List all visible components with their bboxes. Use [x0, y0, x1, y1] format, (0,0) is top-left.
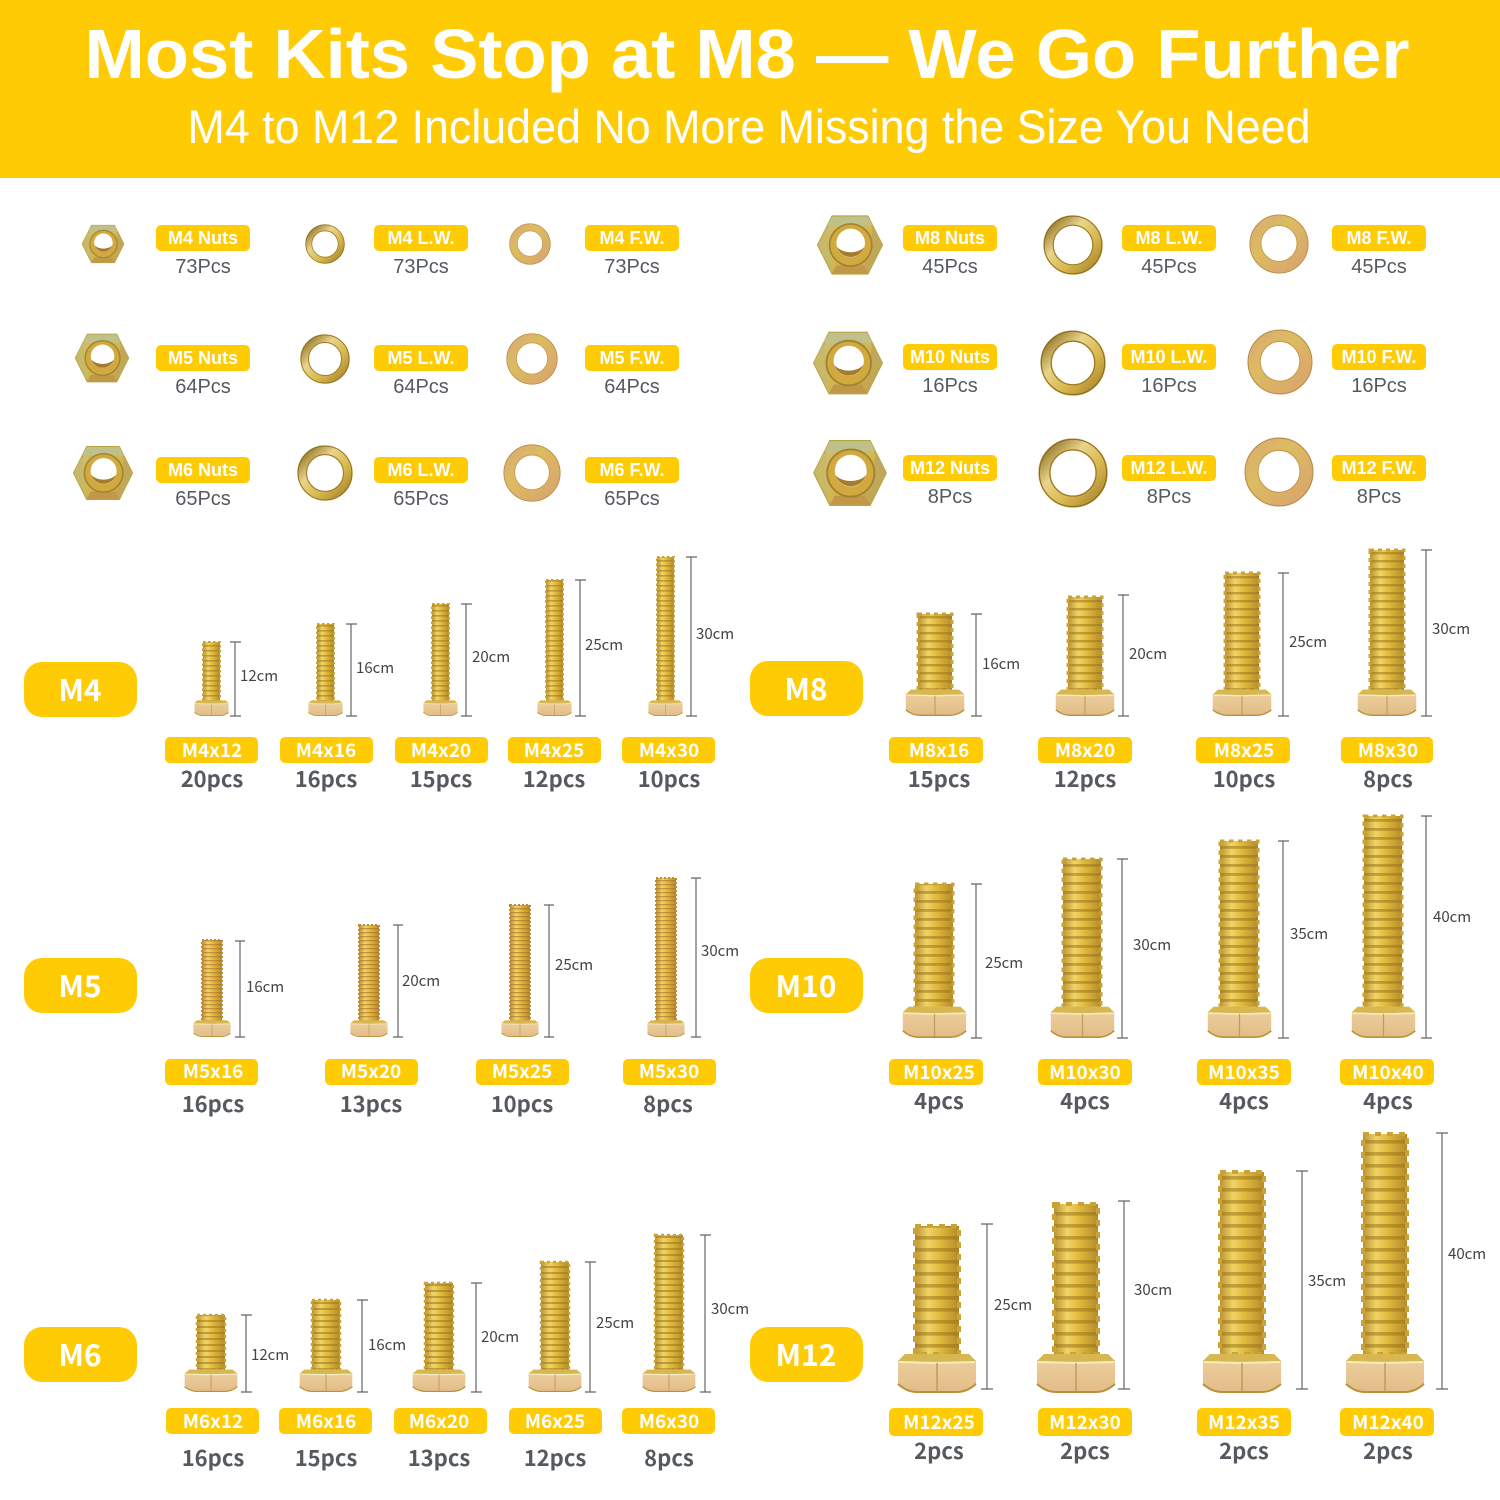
bolt M5x30: 30cm — [701, 940, 739, 961]
label: M8 F.W. — [1332, 225, 1426, 278]
label M10x35 — [1197, 1058, 1291, 1116]
label M12x35 — [1197, 1408, 1291, 1466]
panel: nuts and washers M4-M6 — [74, 224, 679, 510]
label M6x25 — [509, 1407, 602, 1473]
label M5x30 — [623, 1057, 716, 1119]
icon: M5 nut — [76, 334, 128, 382]
bolt M5x20: 20cm — [402, 970, 440, 991]
label M6x12: 16pcs — [182, 1441, 244, 1473]
label: M4 Nuts — [156, 225, 250, 278]
label M4x30 — [622, 736, 715, 794]
icon: M8 lock washer — [1044, 216, 1102, 274]
bolt M12x40: 40cm — [1448, 1243, 1486, 1264]
label M6x30 — [622, 1407, 715, 1473]
label M12x25 — [889, 1408, 983, 1466]
label M5x25 — [476, 1057, 569, 1119]
label: M12 L.W. — [1122, 455, 1216, 508]
bolt M4x20 — [423, 604, 510, 716]
label: M6 L.W. — [374, 457, 468, 510]
icon: M8 flat washer — [1250, 215, 1308, 273]
label M10x25: M10x25 — [903, 1058, 975, 1085]
label: M8 Nuts: 45Pcs — [922, 256, 978, 278]
label: M4 F.W. — [585, 225, 679, 278]
label M4x12: M4x12 — [182, 736, 242, 763]
bolt M6x30: 30cm — [711, 1298, 749, 1319]
bolt M4x30: 30cm — [696, 623, 734, 644]
label M4x16: 16pcs — [295, 762, 357, 794]
M5 size badge — [24, 958, 137, 1013]
label M6x30: M6x30 — [639, 1407, 699, 1434]
bolt M6x25: 25cm — [596, 1312, 634, 1333]
icon: M8 nut — [818, 216, 882, 274]
label M8x20: 12pcs — [1054, 762, 1116, 794]
label: M8 Nuts: M8 Nuts — [915, 228, 985, 248]
label M4x20: 15pcs — [410, 762, 472, 794]
icon: M12 lock washer — [1039, 439, 1107, 507]
label: M4 L.W.: 73Pcs — [393, 256, 449, 278]
bolt M6x30 — [643, 1235, 749, 1392]
M6 size badge: M6 — [58, 1331, 102, 1375]
bolt M5x25: 25cm — [555, 954, 593, 975]
bolt M12x30: 30cm — [1134, 1279, 1172, 1300]
bolt M4x16: 16cm — [356, 657, 394, 678]
label: M12 Nuts: 8Pcs — [928, 486, 972, 508]
bolt M6x20 — [413, 1283, 519, 1392]
label: M5 Nuts: M5 Nuts — [168, 348, 238, 368]
label M6x20: 13pcs — [408, 1441, 470, 1473]
label M5x16: 16pcs — [182, 1087, 244, 1119]
label M8x20: M8x20 — [1055, 736, 1115, 763]
label: M10 F.W.: 16Pcs — [1351, 375, 1407, 397]
label M5x30: M5x30 — [639, 1057, 699, 1084]
label: M6 Nuts: M6 Nuts — [168, 460, 238, 480]
label M12x40 — [1340, 1408, 1434, 1466]
bolt M5x16: 16cm — [246, 976, 284, 997]
bolt M6x16: 16cm — [368, 1334, 406, 1355]
label: M5 L.W.: M5 L.W. — [388, 348, 454, 368]
bolt M4x12 — [194, 642, 278, 716]
label: M5 L.W.: 64Pcs — [393, 376, 449, 398]
bolt M4x20: 20cm — [472, 646, 510, 667]
label: M6 L.W.: 65Pcs — [393, 488, 449, 510]
bolt M8x25 — [1213, 573, 1327, 716]
bolt M8x25: 25cm — [1289, 631, 1327, 652]
label M10x40 — [1340, 1058, 1434, 1116]
label: M5 F.W.: 64Pcs — [604, 376, 660, 398]
icon: M6 lock washer — [298, 446, 352, 500]
bolt M10x40 — [1352, 816, 1471, 1038]
label M8x25 — [1196, 736, 1290, 794]
M5 size badge: M5 — [58, 962, 102, 1006]
label: M5 Nuts: 64Pcs — [175, 376, 231, 398]
label M4x16 — [280, 736, 373, 794]
label M6x16: 15pcs — [295, 1441, 357, 1473]
panel: M5 bolts — [24, 878, 739, 1119]
label: M10 F.W.: M10 F.W. — [1341, 347, 1417, 367]
label: M8 F.W.: M8 F.W. — [1346, 228, 1412, 248]
label M4x20 — [395, 736, 488, 794]
title: Most Kits Stop at M8 — We Go Further — [84, 15, 1410, 93]
label M5x30: 8pcs — [643, 1087, 693, 1119]
label M4x16: M4x16 — [296, 736, 356, 763]
label M12x30: 2pcs — [1060, 1434, 1110, 1466]
bolt M4x25: 25cm — [585, 634, 623, 655]
label: M10 F.W. — [1332, 344, 1426, 397]
M8 size badge: M8 — [784, 665, 828, 709]
label: M12 L.W.: M12 L.W. — [1130, 458, 1208, 478]
label M4x30: 10pcs — [638, 762, 700, 794]
label M8x20 — [1038, 736, 1132, 794]
label: M4 F.W.: M4 F.W. — [599, 228, 665, 248]
label M10x25: 4pcs — [914, 1084, 964, 1116]
icon: M6 nut — [74, 447, 132, 499]
bolt M4x16 — [308, 624, 394, 716]
icon: M6 flat washer — [504, 445, 560, 501]
bolt M12x25: 25cm — [994, 1294, 1032, 1315]
label M4x12 — [165, 736, 258, 794]
label M4x30: M4x30 — [639, 736, 699, 763]
bolt M8x30: 30cm — [1432, 618, 1470, 639]
label: M8 F.W.: 45Pcs — [1351, 256, 1407, 278]
M6 size badge — [24, 1327, 137, 1382]
label: M5 F.W. — [585, 345, 679, 398]
label M4x25: M4x25 — [524, 736, 584, 763]
label: M4 Nuts: M4 Nuts — [168, 228, 238, 248]
bolt M8x30 — [1358, 550, 1470, 716]
label M12x40: 2pcs — [1363, 1434, 1413, 1466]
label: M10 L.W. — [1122, 344, 1216, 397]
label: M12 F.W.: M12 F.W. — [1341, 458, 1417, 478]
bolt M6x20: 20cm — [481, 1326, 519, 1347]
M12 size badge — [750, 1327, 863, 1382]
bolt M10x25: 25cm — [985, 952, 1023, 973]
label M6x20: M6x20 — [409, 1407, 469, 1434]
label: M10 Nuts: 16Pcs — [922, 375, 978, 397]
bolt M12x40 — [1346, 1133, 1486, 1392]
icon: M10 lock washer — [1041, 331, 1105, 395]
label M6x30: 8pcs — [644, 1441, 694, 1473]
label M12x30 — [1038, 1408, 1132, 1466]
icon: M4 flat washer — [510, 224, 550, 264]
bolt M8x16: 16cm — [982, 653, 1020, 674]
bolt M4x30 — [648, 557, 734, 716]
label: M5 F.W.: M5 F.W. — [599, 348, 665, 368]
panel: M12 bolts — [750, 1133, 1486, 1466]
label M8x30: 8pcs — [1363, 762, 1413, 794]
label M5x25: M5x25 — [492, 1057, 552, 1084]
bolt M10x30 — [1051, 859, 1171, 1038]
panel: M10 bolts — [750, 816, 1471, 1116]
label: M12 Nuts: M12 Nuts — [910, 458, 990, 478]
M10 size badge — [750, 958, 863, 1013]
label M12x40: M12x40 — [1352, 1408, 1424, 1435]
icon: M5 lock washer — [301, 335, 349, 383]
icon: M10 flat washer — [1248, 330, 1312, 394]
label: M12 Nuts — [903, 455, 997, 508]
bolt M5x30 — [647, 878, 739, 1037]
label M10x35: M10x35 — [1208, 1058, 1280, 1085]
label M4x20: M4x20 — [411, 736, 471, 763]
label M8x30: M8x30 — [1358, 736, 1418, 763]
label M8x25: M8x25 — [1214, 736, 1274, 763]
label: M4 Nuts: 73Pcs — [175, 256, 231, 278]
bolt M6x12 — [185, 1315, 289, 1392]
bolt M8x20 — [1056, 595, 1167, 716]
label M10x30: M10x30 — [1049, 1058, 1121, 1085]
icon: M4 lock washer — [306, 225, 344, 263]
bolt M8x16 — [906, 614, 1020, 716]
label M12x35: M12x35 — [1208, 1408, 1280, 1435]
header banner — [0, 0, 1500, 178]
label M10x30: 4pcs — [1060, 1084, 1110, 1116]
label M8x16: M8x16 — [909, 736, 969, 763]
bolt M6x16 — [300, 1300, 406, 1392]
label M6x12: M6x12 — [183, 1407, 243, 1434]
label M4x25: 12pcs — [523, 762, 585, 794]
label M6x20 — [394, 1407, 487, 1473]
label M6x16: M6x16 — [296, 1407, 356, 1434]
label: M8 L.W.: M8 L.W. — [1136, 228, 1202, 248]
label: M4 L.W.: M4 L.W. — [388, 228, 454, 248]
label: M12 F.W. — [1332, 455, 1426, 508]
label M10x25 — [889, 1058, 983, 1116]
label: M6 Nuts — [156, 457, 250, 510]
bolt M6x12: 12cm — [251, 1344, 289, 1365]
icon: M10 nut — [814, 333, 882, 393]
bolt M12x35 — [1203, 1171, 1346, 1392]
bolt M5x25 — [501, 905, 593, 1037]
M10 size badge: M10 — [776, 962, 836, 1006]
label: M6 F.W. — [585, 457, 679, 510]
label: M6 F.W.: 65Pcs — [604, 488, 660, 510]
label M6x16 — [279, 1407, 372, 1473]
bolt M6x25 — [529, 1262, 634, 1392]
label M8x16: 15pcs — [908, 762, 970, 794]
bolt M10x35 — [1208, 841, 1328, 1038]
label M5x20: 13pcs — [340, 1087, 402, 1119]
bolt M12x30 — [1037, 1201, 1172, 1392]
label M12x25: 2pcs — [914, 1434, 964, 1466]
label: M5 Nuts — [156, 345, 250, 398]
label M6x25: 12pcs — [524, 1441, 586, 1473]
label: M10 L.W.: M10 L.W. — [1130, 347, 1208, 367]
M12 size badge: M12 — [776, 1331, 836, 1375]
panel: nuts and washers M8-M12 — [814, 215, 1426, 508]
label M4x25 — [508, 736, 601, 794]
label: M5 L.W. — [374, 345, 468, 398]
bolt M4x12: 12cm — [240, 665, 278, 686]
bolt M8x20: 20cm — [1129, 643, 1167, 664]
icon: M12 flat washer — [1245, 438, 1313, 506]
M8 size badge — [750, 661, 863, 716]
icon: M12 nut — [814, 441, 886, 505]
bolt M10x35: 35cm — [1290, 923, 1328, 944]
label: M4 L.W. — [374, 225, 468, 278]
label M5x16: M5x16 — [183, 1057, 243, 1084]
label: M10 L.W.: 16Pcs — [1141, 375, 1197, 397]
label M4x12: 20pcs — [181, 762, 243, 794]
bolt M12x35: 35cm — [1308, 1270, 1346, 1291]
label M10x40: 4pcs — [1363, 1084, 1413, 1116]
bolt M10x30: 30cm — [1133, 934, 1171, 955]
bolt M5x20 — [350, 925, 440, 1037]
label: M6 Nuts: 65Pcs — [175, 488, 231, 510]
label: M8 L.W. — [1122, 225, 1216, 278]
label: M4 F.W.: 73Pcs — [604, 256, 660, 278]
label M5x25: 10pcs — [491, 1087, 553, 1119]
label M8x25: 10pcs — [1213, 762, 1275, 794]
M4 size badge — [24, 662, 137, 717]
label M12x25: M12x25 — [903, 1408, 975, 1435]
label: M8 Nuts — [903, 225, 997, 278]
label: M12 F.W.: 8Pcs — [1357, 486, 1401, 508]
label M8x30 — [1341, 736, 1433, 794]
bolt M10x25 — [903, 884, 1023, 1038]
label M5x20 — [325, 1057, 418, 1119]
label M10x40: M10x40 — [1352, 1058, 1424, 1085]
label M8x16 — [889, 736, 983, 794]
label: M10 Nuts — [903, 344, 997, 397]
bolt M4x25 — [537, 580, 623, 716]
label M10x30 — [1038, 1058, 1132, 1116]
subtitle: M4 to M12 Included No More Missing the Size You Need — [188, 100, 1310, 153]
label: M8 L.W.: 45Pcs — [1141, 256, 1197, 278]
M4 size badge: M4 — [58, 666, 102, 710]
label M12x30: M12x30 — [1049, 1408, 1121, 1435]
label M6x12 — [166, 1407, 259, 1473]
label M5x16 — [165, 1057, 258, 1119]
label M10x35: 4pcs — [1219, 1084, 1269, 1116]
label M6x25: M6x25 — [525, 1407, 585, 1434]
label: M6 F.W.: M6 F.W. — [599, 460, 665, 480]
panel: M4 bolts — [24, 557, 734, 794]
label M12x35: 2pcs — [1219, 1434, 1269, 1466]
panel: M6 bolts — [24, 1235, 749, 1473]
bolt M5x16 — [193, 940, 284, 1037]
icon: M5 flat washer — [507, 334, 557, 384]
bolt M10x40: 40cm — [1433, 906, 1471, 927]
bolt M12x25 — [898, 1224, 1032, 1392]
label: M12 L.W.: 8Pcs — [1147, 486, 1191, 508]
label: M10 Nuts: M10 Nuts — [910, 347, 990, 367]
label: M6 L.W.: M6 L.W. — [388, 460, 454, 480]
label M5x20: M5x20 — [341, 1057, 401, 1084]
panel: M8 bolts — [750, 550, 1470, 794]
icon: M4 nut — [82, 226, 124, 262]
